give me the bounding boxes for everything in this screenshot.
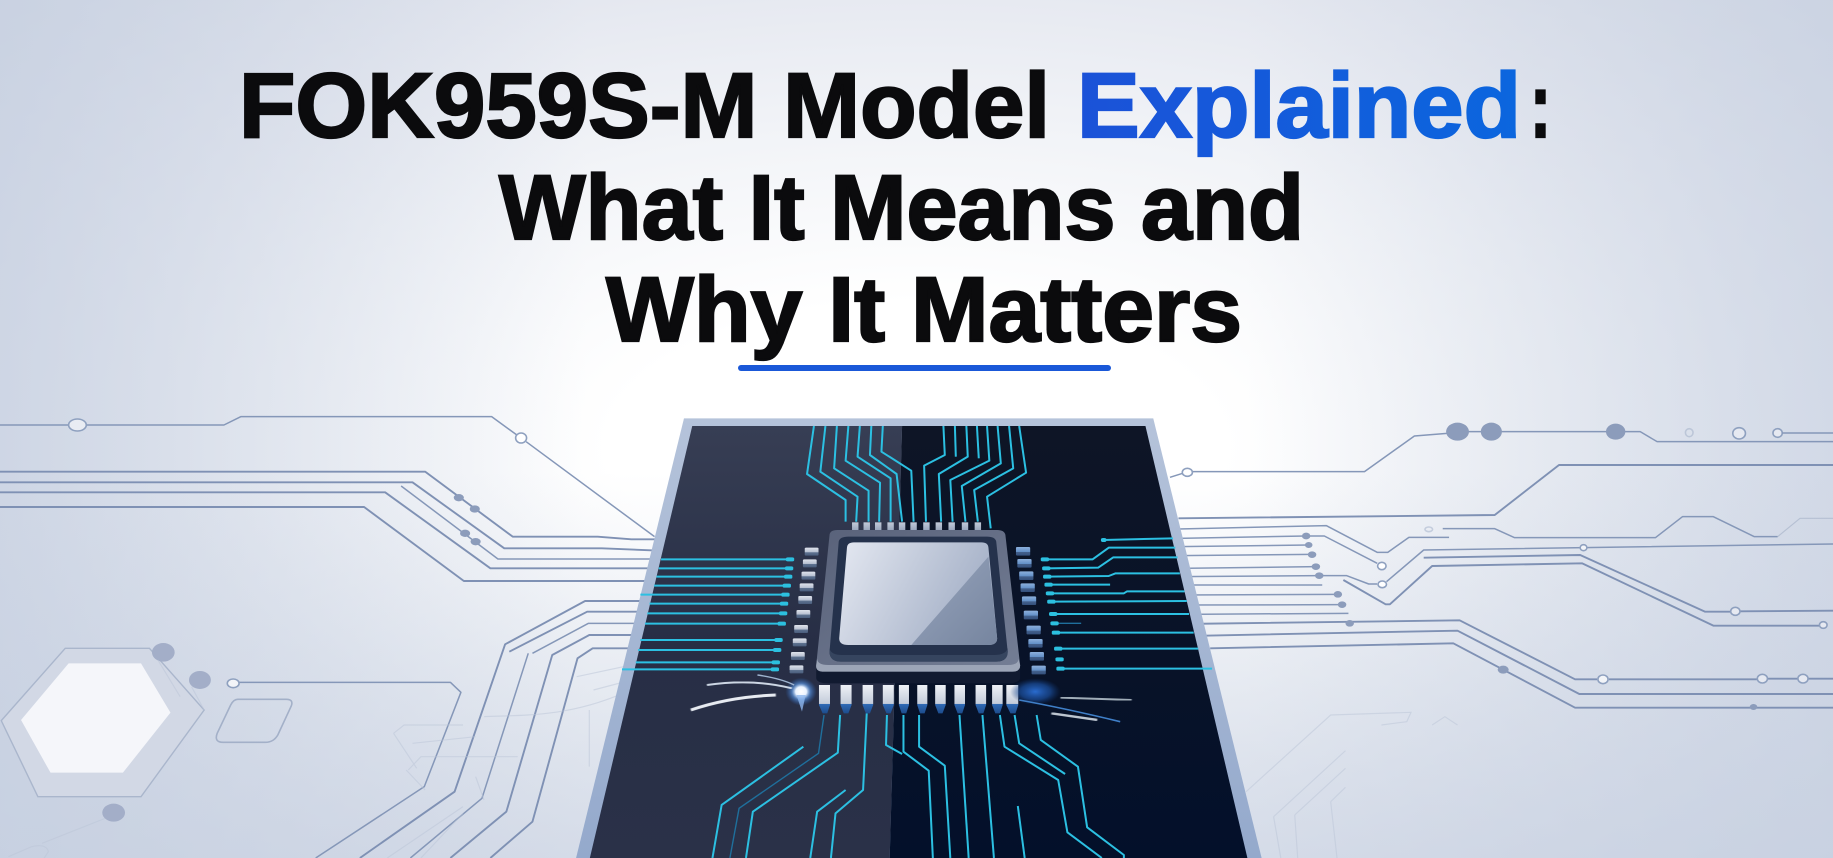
board dark surface	[590, 426, 1247, 858]
circuit board	[576, 418, 1262, 858]
right cyan traces	[1041, 538, 1212, 671]
left lower traces	[227, 601, 660, 858]
chip package	[816, 530, 1020, 683]
bottom chip pins	[819, 685, 1018, 713]
connector dots	[102, 643, 211, 822]
highlighted word: Explained	[1077, 55, 1521, 157]
chip glass die	[839, 542, 997, 645]
left circuit traces and hexagon	[0, 417, 660, 858]
faint lower traces	[1246, 712, 1458, 858]
title: :	[1530, 55, 1551, 157]
title: Why It Matters	[606, 259, 1242, 361]
faint ghost traces	[8, 660, 631, 858]
right lower traces	[1182, 620, 1833, 710]
title: What It Means and	[499, 157, 1304, 259]
top cyan bus traces	[807, 426, 1026, 528]
title: FOK959S-M Model	[239, 55, 1050, 157]
hexagon emblem	[1, 648, 204, 797]
title underline	[738, 365, 1111, 371]
right light sparkle	[1010, 678, 1132, 722]
left light sparkle	[691, 675, 817, 712]
right upper traces	[1170, 423, 1833, 518]
left chip pads	[790, 548, 819, 673]
rounded pad outline	[216, 699, 292, 742]
left cyan traces	[622, 557, 794, 671]
right middle traces	[1178, 517, 1833, 628]
top chip pins	[852, 522, 981, 530]
right circuit traces	[1170, 423, 1833, 858]
board bevel edge	[576, 418, 1262, 858]
left upper traces	[0, 417, 660, 581]
right chip pads	[1016, 547, 1046, 674]
bottom cyan traces	[712, 713, 1124, 858]
title	[239, 55, 1551, 361]
